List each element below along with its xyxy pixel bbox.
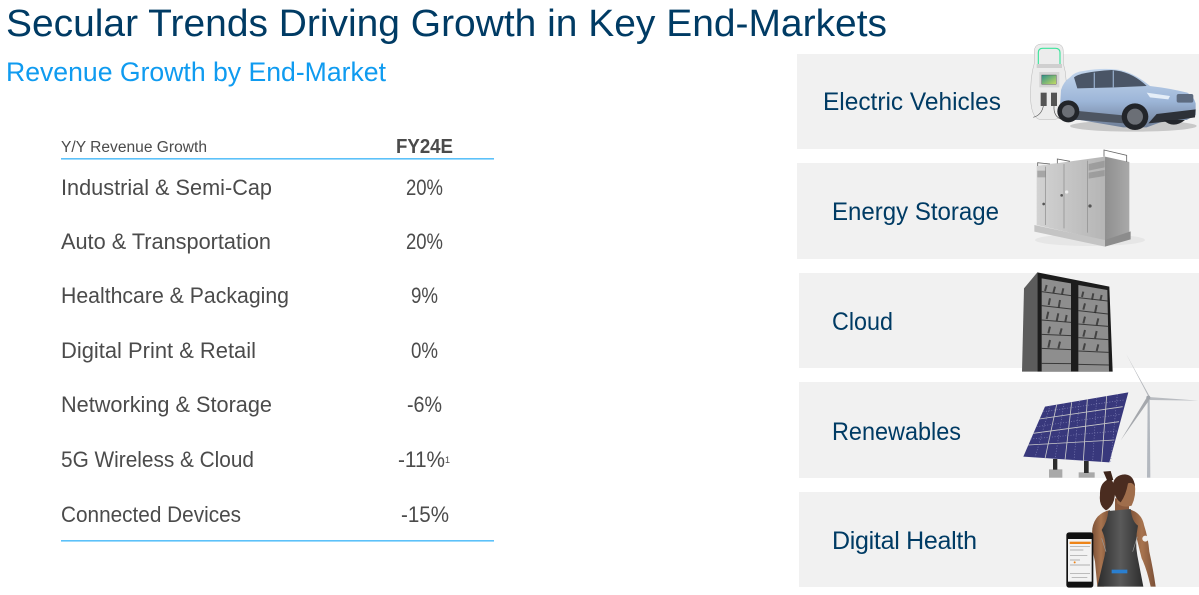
icon: solar panel and wind turbine [1023,354,1198,478]
panel: Renewables [799,354,1199,478]
label: Energy Storage: Energy Storage [832,198,999,226]
row: Healthcare & Packaging [61,283,438,308]
icon: EV charger and car [1031,44,1197,132]
revenue growth table [61,136,494,542]
row: Industrial & Semi-Cap: Industrial & Semi-Cap [61,175,272,200]
row: Auto & Transportation [61,229,443,254]
table column heading: FY24E [396,136,453,158]
panel: Electric Vehicles [797,44,1199,149]
row: Connected Devices: -15% [401,502,449,527]
row: Connected Devices: Connected Devices [61,502,241,527]
row: Networking & Storage: Networking & Storage [61,392,272,417]
row: Auto & Transportation: 20% [406,229,443,254]
icon: woman with wearable and phone [1066,471,1156,588]
label: Digital Health: Digital Health [832,527,977,555]
row: Networking & Storage [61,392,442,417]
row: Industrial & Semi-Cap: 20% [406,175,443,200]
row: 5G Wireless & Cloud: 1 [445,455,450,465]
row: Healthcare & Packaging: Healthcare & Packaging [61,283,289,308]
row: 5G Wireless & Cloud [61,447,450,472]
icon: server rack [1022,272,1113,372]
row: 5G Wireless & Cloud: -11% [398,447,445,472]
subtitle: Revenue Growth by End-Market [6,57,386,87]
row: Auto & Transportation: Auto & Transportation [61,229,271,254]
label: Cloud: Cloud [832,308,893,336]
panel: Digital Health [799,471,1199,588]
row: Digital Print & Retail: Digital Print & Retail [61,338,256,363]
panel: Energy Storage [797,150,1199,259]
row: Industrial & Semi-Cap [61,175,443,200]
row: Healthcare & Packaging: 9% [411,283,438,308]
label: Electric Vehicles: Electric Vehicles [823,88,1001,116]
row: Networking & Storage: -6% [407,392,442,417]
row: Digital Print & Retail [61,338,438,363]
row: 5G Wireless & Cloud: 5G Wireless & Cloud [61,447,254,472]
panel: Cloud [799,272,1199,372]
row: Connected Devices [61,502,449,527]
row: Digital Print & Retail: 0% [411,338,438,363]
table header label: Y/Y Revenue Growth [61,139,207,156]
label: Renewables: Renewables [832,418,961,446]
title: Secular Trends Driving Growth in Key End-Markets [6,3,887,45]
icon: battery storage cabinet [1034,150,1145,247]
